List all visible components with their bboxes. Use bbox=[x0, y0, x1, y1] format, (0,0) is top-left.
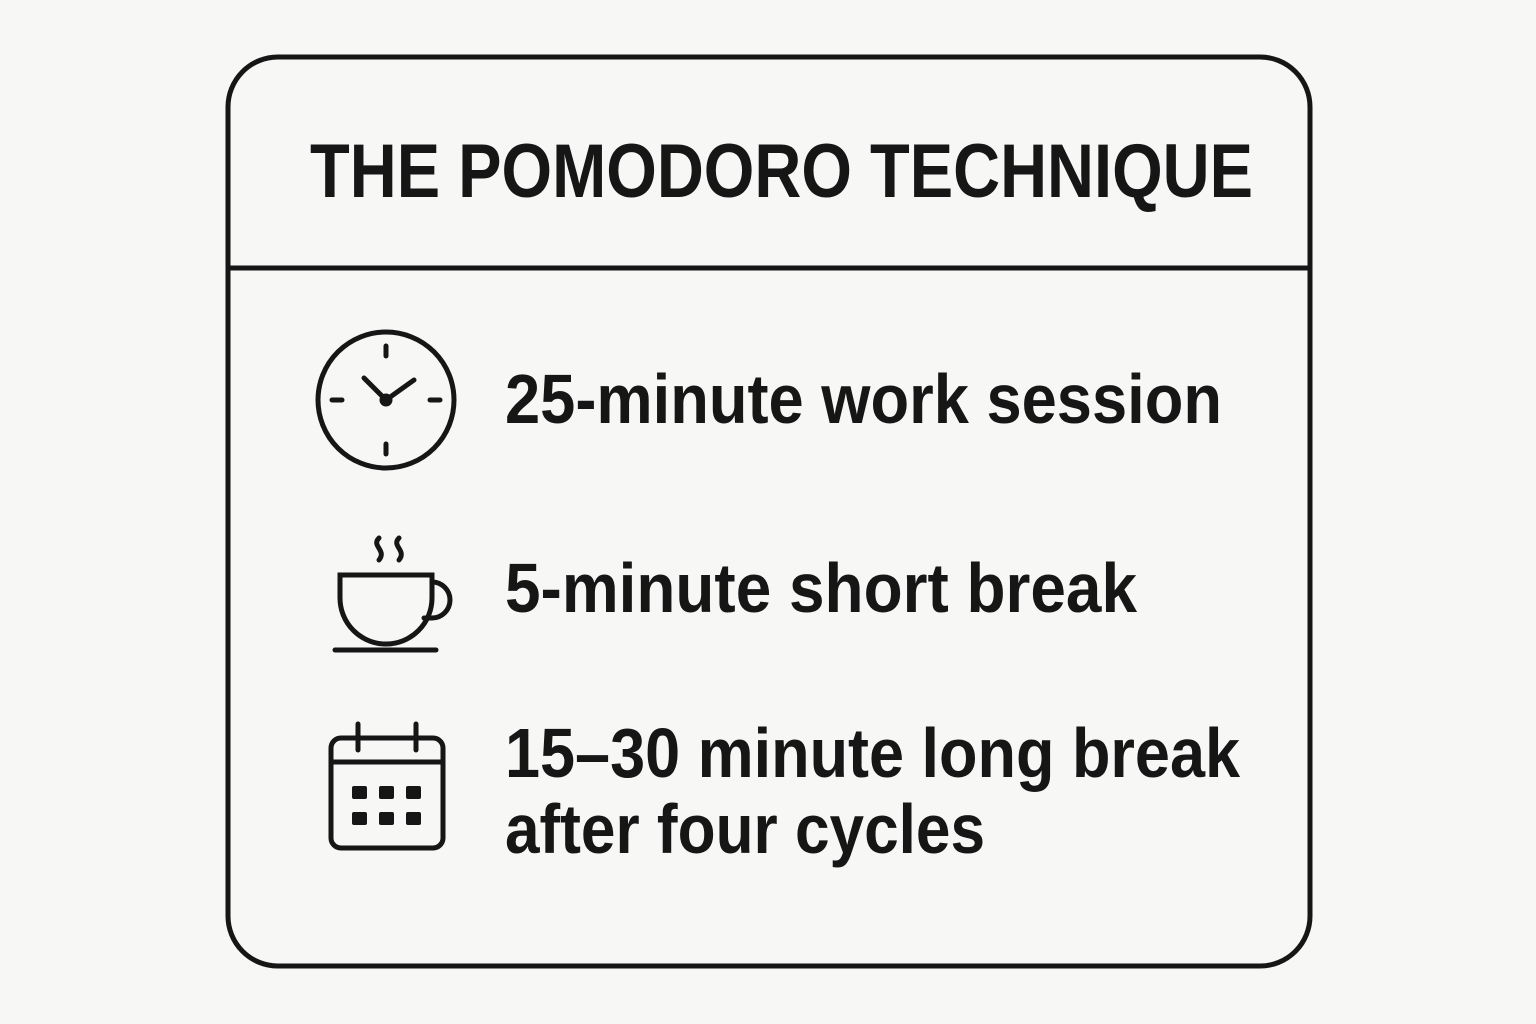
panel: main card bbox=[228, 57, 1310, 966]
text: long break bbox=[505, 714, 1240, 868]
text: long break: after four cycles bbox=[505, 790, 985, 868]
icon: calendar bbox=[331, 724, 443, 848]
icon: clock bbox=[318, 332, 454, 468]
icon: coffee cup bbox=[335, 538, 450, 650]
text: short break: 5-minute short break bbox=[505, 549, 1137, 627]
title: THE POMODORO TECHNIQUE bbox=[310, 129, 1253, 214]
text: long break: 15–30 minute long break bbox=[505, 714, 1240, 792]
text: work session: 25-minute work session bbox=[505, 360, 1222, 438]
